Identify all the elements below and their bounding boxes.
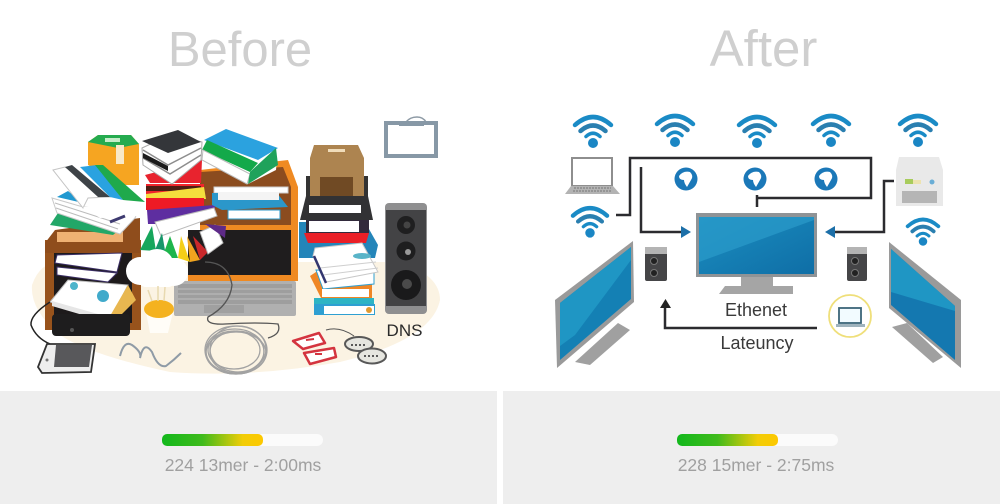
panel: after metrics <box>503 391 1000 504</box>
progress bar: before <box>162 434 323 446</box>
monitor: left <box>555 241 634 368</box>
orange desk frame <box>188 160 298 281</box>
metric text: before: 224 13mer - 2:00ms <box>165 455 322 475</box>
icon: globe 1 <box>674 168 698 190</box>
squiggle cable <box>120 344 181 366</box>
cup <box>144 286 174 333</box>
reels <box>345 337 386 364</box>
book stack top right <box>202 129 278 184</box>
arrow: to monitor from right <box>825 181 894 238</box>
icon: laptop <box>565 158 620 194</box>
icon: globe 3 <box>814 168 838 190</box>
book pile right <box>299 176 378 315</box>
icon: cardboard box <box>88 135 139 185</box>
icon: highlighted laptop <box>829 295 871 337</box>
keyboard laptop base <box>174 281 296 316</box>
progress bar: after <box>677 434 838 446</box>
wifi icon 5 <box>900 116 936 147</box>
monitor: centre <box>696 213 817 294</box>
icon: clipboard <box>386 117 436 156</box>
desk shadow blob <box>32 262 440 374</box>
cable coil <box>205 326 267 374</box>
panel: before metrics <box>0 391 497 504</box>
red tags <box>293 333 336 364</box>
heading: Before: Before <box>168 23 312 77</box>
diagram: organised network <box>555 116 961 368</box>
icon: small speaker right <box>847 247 867 281</box>
icon: speaker <box>385 203 427 314</box>
wifi icon 7 <box>908 219 938 246</box>
shelf books lower <box>50 253 136 323</box>
router device <box>52 314 130 336</box>
fan of colour swatches <box>140 224 226 262</box>
icon: router <box>896 157 943 206</box>
metric text: after: 228 15mer - 2:75ms <box>678 455 835 475</box>
label: Lateuncy: Lateuncy <box>720 333 794 353</box>
shelf books right <box>212 187 288 219</box>
cable to tablet <box>31 302 50 344</box>
book stack centre <box>142 130 217 236</box>
illustration: cluttered desk <box>31 117 440 374</box>
cloud <box>126 249 188 287</box>
icon: globe 2 <box>744 168 766 190</box>
shelf unit left <box>45 218 141 330</box>
wifi icon 6 <box>573 208 607 238</box>
book pile left <box>50 165 145 235</box>
cable from keyboard <box>205 262 279 338</box>
arrow: latency return <box>660 299 817 328</box>
wifi icon 1 <box>575 117 611 148</box>
wifi icon 4 <box>813 116 849 147</box>
wifi icon 2 <box>657 116 693 147</box>
wifi icon 3 <box>739 117 775 148</box>
label: DNS: DNS <box>387 321 422 340</box>
heading: After: After <box>710 20 817 77</box>
monitor: right <box>889 242 961 368</box>
icon: small speaker left <box>645 247 667 281</box>
label: Ethenet: Ethenet <box>725 300 787 320</box>
arrow: to monitor from left <box>641 167 691 238</box>
cable to reels <box>326 329 354 336</box>
icon: brown box <box>310 145 364 197</box>
connector: top loop <box>616 158 871 215</box>
icon: tablet <box>38 344 95 373</box>
